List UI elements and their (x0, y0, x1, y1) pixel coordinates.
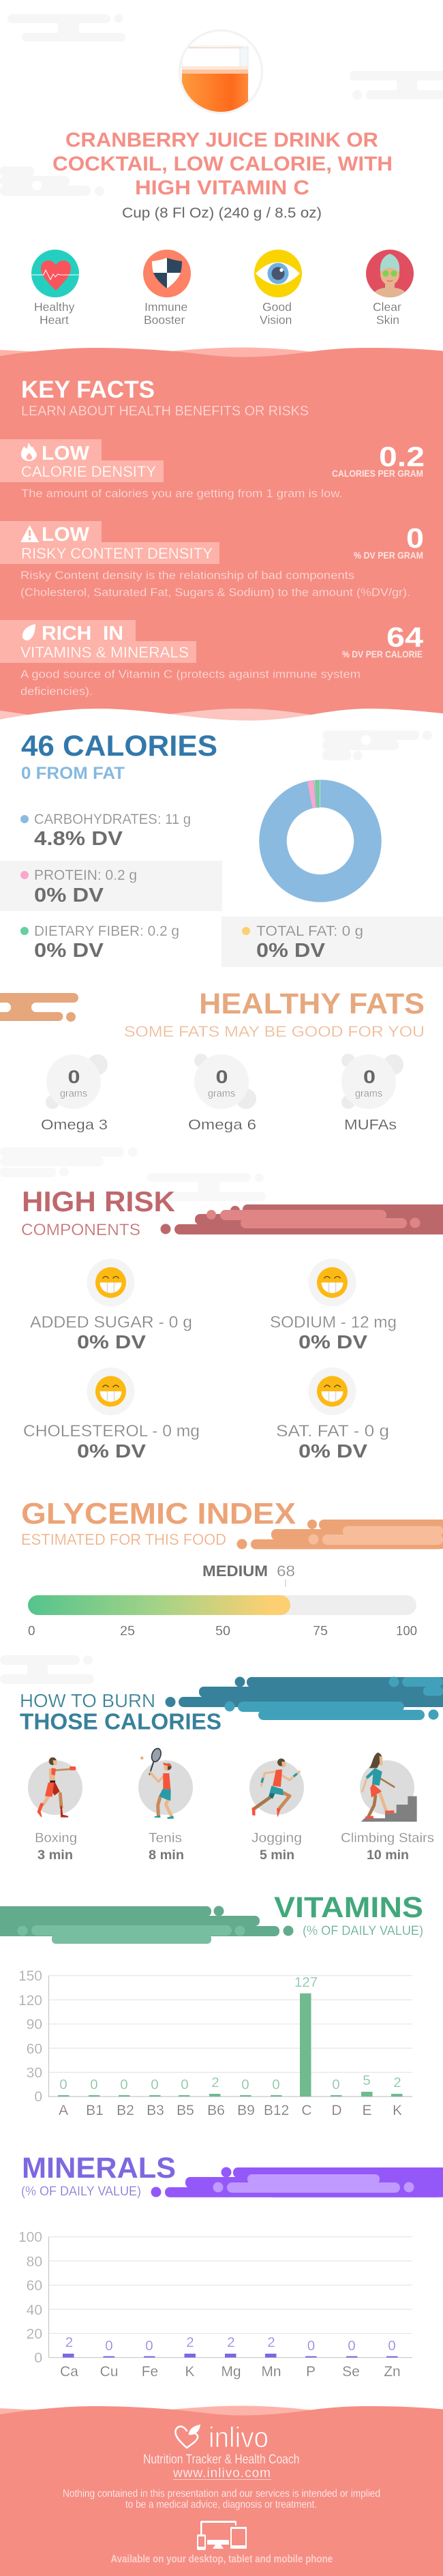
duration: 3 min (37, 1848, 73, 1863)
heading: VITAMINS (274, 1891, 423, 1924)
duration: 5 min (260, 1848, 294, 1863)
background cloud: top left (7, 14, 125, 42)
panel: key facts (0, 348, 443, 720)
section: high risk components (21, 1185, 443, 1462)
bar chart: vitamins: 120 (18, 1993, 42, 2009)
bar chart: vitamins: 0 (34, 2089, 42, 2105)
panel: footer (0, 2406, 443, 2576)
bar chart: minerals: 2 (186, 2335, 194, 2350)
scale labels: 25 (120, 1625, 135, 1638)
fat: mufas: grams (355, 1089, 382, 1099)
description: deficiencies). (20, 685, 93, 698)
bar chart: minerals: 0 (348, 2338, 356, 2354)
scale labels: 0 (28, 1625, 35, 1638)
label: Clear (373, 300, 401, 314)
legend: total fat (222, 917, 443, 967)
legend: protein (0, 861, 222, 911)
icon: stair climber (361, 1753, 417, 1822)
bar chart: vitamins: E (362, 2103, 372, 2118)
bar chart: minerals: Cu (100, 2364, 118, 2380)
bar chart: minerals: 20 (27, 2326, 42, 2342)
description: A good source of Vitamin C (protects against immune system (20, 668, 361, 681)
item: cholesterol: CHOLESTEROL - 0 mg (23, 1422, 200, 1440)
value: 0.2 (379, 441, 425, 472)
bar chart: vitamins: 150 (18, 1968, 42, 1984)
section: healthy fats (41, 988, 425, 1133)
legend: dietary fiber: DIETARY FIBER: 0.2 g (34, 923, 179, 939)
bar chart: vitamins: 0 (90, 2077, 98, 2092)
bar chart: vitamins: 0 (241, 2077, 249, 2092)
icon: leaf (22, 624, 35, 640)
icon: tennis player (140, 1747, 174, 1819)
subheading: SOME FATS MAY BE GOOD FOR YOU (124, 1023, 425, 1040)
bar chart: minerals: 80 (27, 2254, 42, 2270)
subheading: LEARN ABOUT HEALTH BENEFITS OR RISKS (21, 404, 309, 419)
benefit: good vision (254, 250, 302, 327)
bar chart: vitamins: 0 (181, 2077, 189, 2092)
band (0, 1906, 293, 1944)
bar chart: vitamins: 2 (393, 2075, 401, 2090)
unit: % DV PER GRAM (354, 550, 423, 561)
bar chart: minerals: Ca (60, 2364, 78, 2380)
heading: HOW TO BURN (20, 1690, 155, 1711)
rating: LOW (42, 524, 90, 546)
heading: GLYCEMIC INDEX (21, 1497, 296, 1530)
icon: runner (252, 1758, 299, 1816)
label: Vision (260, 313, 292, 327)
label: Tenis (149, 1831, 182, 1846)
bar chart: vitamins: B3 (147, 2103, 164, 2118)
name: VITAMINS & MINERALS (20, 644, 189, 661)
bar chart: minerals: K (185, 2364, 195, 2380)
icon: warning (20, 525, 39, 542)
label: Booster (144, 313, 185, 327)
value: 64 (386, 621, 423, 653)
bar chart: vitamins: K (393, 2103, 402, 2118)
legend: total fat: TOTAL FAT: 0 g (256, 923, 363, 939)
bar chart: minerals: 0 (34, 2350, 42, 2366)
fat: omega 6: grams (208, 1089, 235, 1099)
rating: MEDIUM (202, 1563, 268, 1580)
gauge bar (28, 1595, 416, 1615)
section: vitamins (0, 1891, 423, 2118)
logo: heart and leaf (175, 2425, 200, 2448)
item: added sugar: 0% DV (77, 1331, 146, 1352)
bar chart: vitamins: 0 (272, 2077, 280, 2092)
bar chart: vitamins: B5 (177, 2103, 194, 2118)
bar chart: minerals: 0 (307, 2338, 315, 2354)
serving size: Cup (8 Fl Oz) (240 g / 8.5 oz) (122, 205, 322, 221)
bar chart: minerals: Zn (384, 2364, 401, 2380)
fat: omega 3: 0 (68, 1067, 80, 1087)
bar chart: minerals: 0 (105, 2338, 113, 2354)
fact: calorie density (0, 439, 425, 500)
fat: omega 6: Omega 6 (188, 1117, 256, 1133)
donut chart (273, 780, 368, 888)
label: Skin (376, 313, 399, 327)
icon: flame (21, 443, 37, 461)
legend: total fat: 0% DV (256, 940, 326, 962)
description: The amount of calories you are getting from 1 gram is low. (21, 487, 343, 500)
section: minerals (18, 2152, 443, 2380)
band (151, 2167, 443, 2197)
band (237, 1520, 443, 1550)
scale labels: 50 (215, 1625, 230, 1638)
subheading: (% OF DAILY VALUE) (21, 2185, 141, 2199)
bar chart: minerals: Mg (221, 2364, 241, 2380)
rating: LOW (42, 443, 90, 464)
label: Climbing Stairs (341, 1831, 434, 1846)
subheading: (% OF DAILY VALUE) (303, 1924, 423, 1938)
bar chart: vitamins: 90 (27, 2017, 42, 2032)
item: sodium (270, 1259, 397, 1352)
bar chart: vitamins: 2 (211, 2075, 219, 2090)
bar chart: minerals: 0 (388, 2338, 396, 2354)
description: Risky Content density is the relationship of bad components (20, 569, 354, 582)
website: www.inlivo.com (172, 2466, 271, 2481)
item: sodium: 0% DV (299, 1331, 367, 1352)
disclaimer: to be a medical advice, diagnosis or treatment. (125, 2499, 317, 2511)
bar chart: vitamins: B6 (207, 2103, 225, 2118)
bar chart: minerals: 100 (18, 2230, 42, 2245)
activity: boxing (28, 1758, 82, 1863)
fat: mufas: MUFAs (344, 1117, 397, 1133)
fact: risky content density (0, 521, 424, 599)
logo wordmark: inlivo (209, 2421, 269, 2453)
background cloud: burn calories (0, 1655, 94, 1684)
activity: jogging (249, 1758, 304, 1863)
band: healthy fats (0, 993, 78, 1022)
legend: dietary fiber: 0% DV (34, 940, 104, 962)
bar chart: minerals: 2 (267, 2335, 275, 2350)
legend: dietary fiber (20, 923, 179, 962)
tagline: Nutrition Tracker & Health Coach (143, 2453, 300, 2467)
title: COCKTAIL, LOW CALORIE, WITH (52, 153, 393, 175)
heading: 46 CALORIES (21, 730, 217, 763)
item: cholesterol: 0% DV (77, 1440, 146, 1462)
title: CRANBERRY JUICE DRINK OR (65, 129, 378, 151)
bar chart: vitamins: A (59, 2103, 68, 2118)
bar chart: vitamins: B12 (264, 2103, 289, 2118)
label: Heart (40, 313, 69, 327)
name: RISKY CONTENT DENSITY (21, 545, 213, 562)
activity: climbing stairs (341, 1753, 434, 1863)
duration: 10 min (367, 1848, 409, 1863)
legend: carbohydrates: CARBOHYDRATES: 11 g (34, 812, 191, 827)
fat: omega 3: grams (60, 1089, 87, 1099)
bar chart: minerals (18, 2230, 412, 2380)
bar chart: minerals: Fe (142, 2364, 158, 2380)
legend: protein: 0% DV (34, 885, 104, 906)
bar chart: minerals: Mn (261, 2364, 281, 2380)
panel background (0, 348, 443, 715)
bar chart: vitamins: D (331, 2103, 342, 2118)
benefit: clear skin (366, 250, 414, 327)
label: Boxing (35, 1831, 77, 1846)
activity: tennis (138, 1747, 193, 1863)
bar chart: minerals: 2 (65, 2335, 73, 2350)
bar chart: vitamins (18, 1968, 412, 2118)
duration: 8 min (149, 1848, 184, 1863)
bar chart: minerals: 0 (145, 2338, 153, 2354)
label: Immune (144, 300, 187, 314)
band (165, 1676, 443, 1720)
bar chart: minerals: 60 (27, 2278, 42, 2294)
label: Jogging (251, 1831, 302, 1846)
icon: heart (31, 250, 79, 297)
label: Healthy (34, 300, 75, 314)
bar chart: minerals: 2 (227, 2335, 235, 2350)
heading: HEALTHY FATS (199, 988, 425, 1020)
description: (Cholesterol, Saturated Fat, Sugars & Sodium) to the amount (%DV/gr). (20, 586, 410, 599)
bar chart: vitamins: 0 (151, 2077, 159, 2092)
subheading: COMPONENTS (21, 1221, 140, 1239)
bar chart: vitamins: B2 (117, 2103, 134, 2118)
fat: mufas: 0 (363, 1067, 376, 1087)
bar chart: vitamins: 127 (294, 1974, 318, 1990)
rating: RICH IN (42, 623, 123, 645)
label: Good (262, 300, 292, 314)
icon: boxer (37, 1758, 76, 1817)
legend: protein: PROTEIN: 0.2 g (34, 868, 137, 883)
background cloud: calories (322, 730, 432, 760)
icon: face with towel (366, 250, 414, 298)
item: added sugar (30, 1259, 192, 1352)
background cloud: title left (0, 166, 104, 196)
subheading: ESTIMATED FOR THIS FOOD (21, 1530, 226, 1548)
wave: lighter top layer (0, 2406, 311, 2420)
item: saturated fat: SAT. FAT - 0 g (276, 1422, 389, 1440)
value: 0 (406, 522, 424, 554)
subheading: 0 FROM FAT (21, 764, 125, 783)
fat: mufas (341, 1054, 403, 1133)
icon: devices (197, 2521, 247, 2550)
footer background (0, 2406, 443, 2576)
benefit: immune booster (143, 250, 191, 327)
bar chart: vitamins: B1 (86, 2103, 104, 2118)
drink photo (180, 30, 262, 115)
bar chart: minerals: Se (342, 2364, 360, 2380)
heading: MINERALS (22, 2152, 176, 2185)
bar chart: minerals: 40 (27, 2303, 42, 2318)
bar chart: vitamins: 0 (120, 2077, 128, 2092)
bar chart: vitamins: 60 (27, 2041, 42, 2057)
background cloud: top right (350, 71, 443, 100)
unit: % DV PER CALORIE (342, 649, 423, 660)
title: HIGH VITAMIN C (135, 177, 309, 199)
scale labels: 100 (396, 1625, 417, 1638)
section: glycemic index (21, 1497, 443, 1638)
fat: omega 3: Omega 3 (41, 1117, 108, 1133)
icon: shield (143, 250, 191, 297)
bar chart: vitamins: B9 (237, 2103, 255, 2118)
title (52, 129, 393, 199)
fat: omega 6: 0 (215, 1067, 228, 1087)
item: saturated fat: 0% DV (299, 1440, 367, 1462)
legend: carbohydrates (20, 812, 191, 850)
section: calories (0, 730, 443, 967)
bar chart: vitamins: 0 (332, 2077, 340, 2092)
bar chart: minerals: P (306, 2364, 316, 2380)
value: 68 (277, 1563, 295, 1580)
wave: lighter top layer (0, 348, 311, 361)
bar chart: vitamins: 5 (363, 2073, 371, 2088)
availability note: Available on your desktop, tablet and mobile phone (110, 2553, 333, 2565)
legend: carbohydrates: 4.8% DV (34, 828, 123, 850)
band (161, 1204, 443, 1234)
heading: HIGH RISK (22, 1185, 175, 1217)
item: cholesterol (23, 1367, 200, 1462)
bar chart: vitamins: 0 (59, 2077, 67, 2092)
background cloud: right of high risk (147, 1173, 266, 1201)
item: saturated fat (276, 1367, 389, 1462)
disclaimer: Nothing contained in this presentation and our services is intended or implied (63, 2488, 380, 2500)
icon: eye (254, 250, 302, 297)
heading: KEY FACTS (21, 376, 155, 403)
background cloud: left of high risk (0, 1147, 138, 1177)
wave: lighter bottom layer (0, 709, 311, 720)
benefit: healthy heart (31, 250, 79, 327)
scale labels (28, 1625, 417, 1638)
heading emphasis: THOSE CALORIES (20, 1709, 222, 1734)
unit: CALORIES PER GRAM (332, 468, 423, 479)
fat: omega 6 (188, 1054, 256, 1133)
scale labels: 75 (313, 1625, 328, 1638)
item: added sugar: ADDED SUGAR - 0 g (30, 1314, 192, 1331)
section: how to burn those calories (20, 1676, 443, 1863)
fat: omega 3 (41, 1054, 108, 1133)
bar chart: vitamins: C (301, 2103, 312, 2118)
name: CALORIE DENSITY (21, 463, 156, 480)
item: sodium: SODIUM - 12 mg (270, 1314, 397, 1331)
bar chart: vitamins: 30 (27, 2065, 42, 2081)
fact: rich in vitamins and minerals (0, 620, 423, 698)
